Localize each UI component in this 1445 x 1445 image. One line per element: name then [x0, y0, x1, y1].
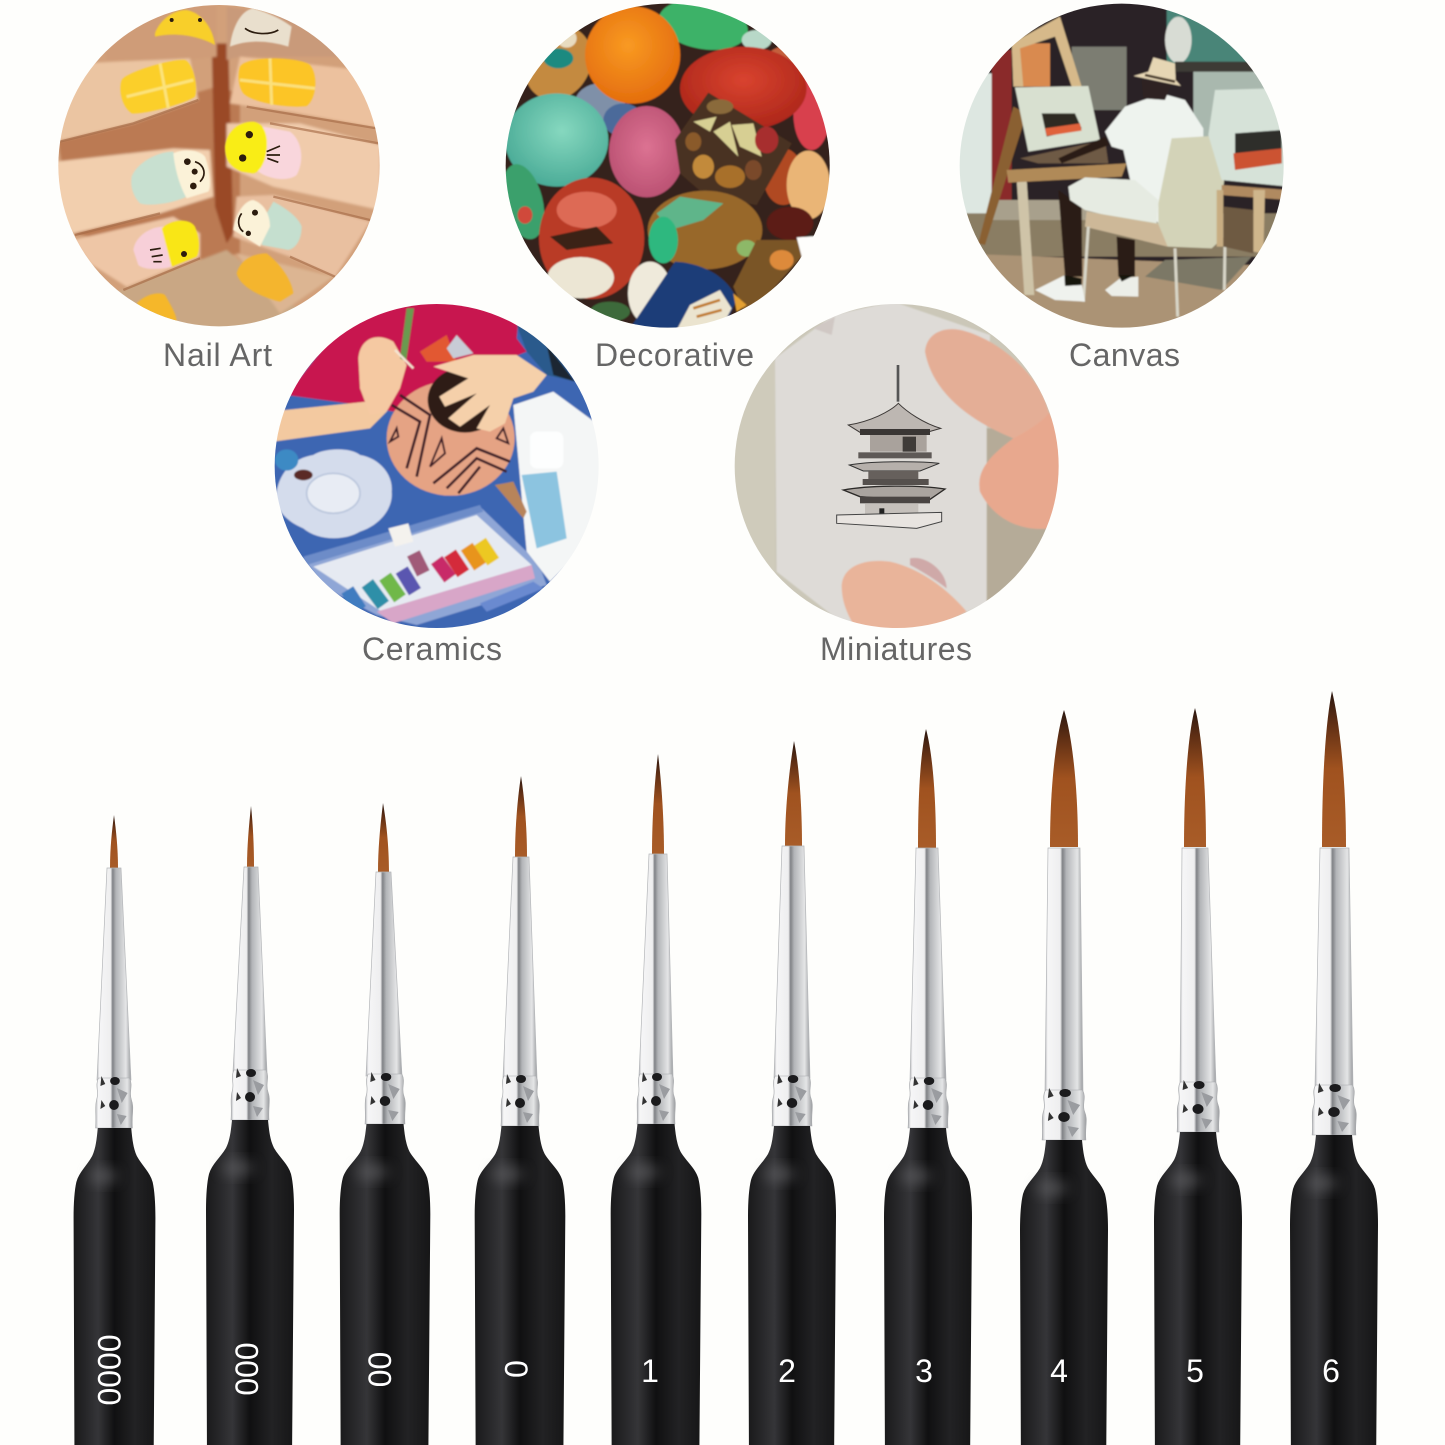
- photo circle: miniatures: [734, 304, 1059, 628]
- hand: [433, 355, 547, 432]
- bottle area: [513, 392, 603, 582]
- brush size 5: [1154, 708, 1242, 1445]
- size label: 2: [778, 1353, 796, 1389]
- size label: 0000: [91, 1334, 127, 1406]
- size label: 5: [1186, 1353, 1204, 1389]
- size label: 6: [1322, 1353, 1340, 1389]
- photo circle: decorative eggs: [506, 4, 830, 328]
- size label: 00: [362, 1352, 398, 1387]
- brush size 0: [475, 776, 565, 1445]
- brush size 0000: [74, 815, 155, 1445]
- label: Nail Art: Nail Art: [163, 337, 272, 373]
- brush size 00: [340, 803, 430, 1445]
- brush size 1: [611, 754, 701, 1445]
- pagoda: [837, 365, 945, 528]
- palette: [276, 449, 392, 538]
- size label: 000: [228, 1342, 264, 1396]
- photo circle: nail art: [58, 5, 380, 326]
- label: Ceramics: Ceramics: [362, 631, 502, 667]
- box of tubes: [303, 507, 547, 625]
- brush size 3: [884, 729, 972, 1445]
- size label: 4: [1050, 1353, 1068, 1389]
- photo circle: ceramics: [274, 304, 598, 628]
- brush size 6: [1290, 691, 1378, 1445]
- size label: 1: [641, 1353, 659, 1389]
- brush size 2: [748, 741, 836, 1445]
- size label: 3: [915, 1353, 933, 1389]
- label: Canvas: Canvas: [1069, 337, 1180, 373]
- photo circle: canvas painter: [960, 4, 1284, 328]
- label: Decorative: Decorative: [595, 337, 754, 373]
- size label: 0: [498, 1360, 534, 1378]
- brush size 4: [1020, 710, 1108, 1445]
- brush size 000: [206, 806, 294, 1445]
- label: Miniatures: Miniatures: [820, 631, 972, 667]
- pot: [387, 381, 515, 496]
